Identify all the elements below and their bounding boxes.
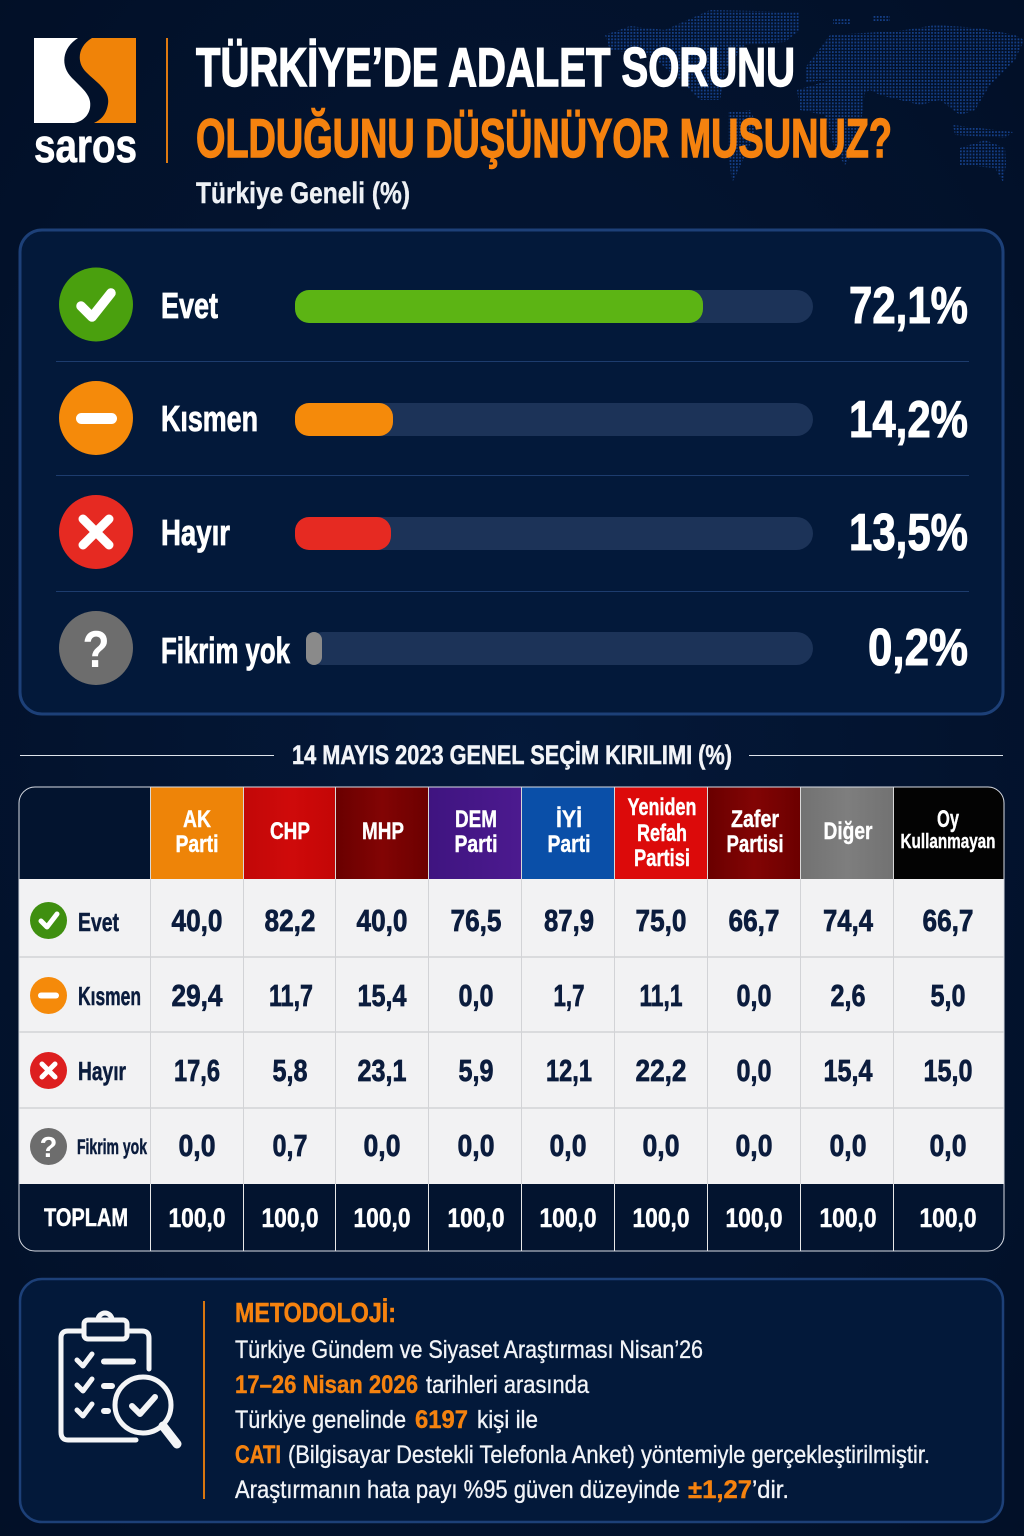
table row: Toplam: 100,0 — [354, 1203, 410, 1233]
table row: Kısmen: 29,4 — [172, 978, 223, 1013]
table row: Evet: 82,2 — [264, 903, 316, 938]
row: Evet: Evet — [161, 285, 218, 326]
table header: Parti — [454, 831, 498, 858]
table header: Parti — [176, 831, 218, 858]
table row: Hayır: 23,1 — [358, 1053, 406, 1088]
row: Fikrim yok: 0,2% — [868, 619, 968, 677]
table header: Oy — [937, 806, 959, 833]
table row: Evet — [30, 902, 974, 939]
table row: Kısmen: 0,0 — [458, 978, 494, 1013]
methodology text: (Bilgisayar Destekli Telefonla Anket) yöntemiyle gerçekleştirilmiştir. — [288, 1441, 930, 1469]
table row: Fikrim yok: 0,0 — [178, 1128, 216, 1163]
table header: DEM — [455, 806, 497, 833]
table header: CHP — [270, 818, 310, 845]
table row: Kısmen: 2,6 — [830, 978, 866, 1013]
methodology text: tarihleri arasında — [426, 1371, 589, 1399]
methodology text: ±1,27 — [688, 1476, 752, 1504]
table row: Kısmen: 1,7 — [554, 978, 584, 1013]
table row: Fikrim yok: ? — [40, 1132, 57, 1164]
methodology text: Araştırmanın hata payı %95 güven düzeyinde — [235, 1476, 680, 1504]
table row: Toplam: 100,0 — [262, 1203, 318, 1233]
table row: Evet: Evet — [78, 907, 119, 937]
table row: Fikrim yok: 0,0 — [830, 1128, 866, 1163]
table header — [176, 794, 996, 872]
table row: Toplam: 100,0 — [920, 1203, 976, 1233]
table row: Hayır: 0,0 — [736, 1053, 772, 1088]
row: Kısmen: Kısmen — [161, 398, 258, 439]
table row: Fikrim yok: Fikrim yok — [77, 1136, 147, 1159]
table header: MHP — [362, 818, 404, 845]
table row: Fikrim yok — [30, 1128, 966, 1165]
table row: Kısmen: 0,0 — [736, 978, 772, 1013]
table row: Fikrim yok: 0,0 — [550, 1128, 586, 1163]
logo: saros — [34, 38, 137, 172]
table row: Toplam: 100,0 — [632, 1203, 690, 1233]
section heading: election breakdown: 14 MAYIS 2023 GENEL SEÇİM KIRILIMI (%) — [292, 740, 732, 770]
table row: Evet: 87,9 — [544, 903, 594, 938]
table header: Yeniden — [628, 794, 696, 821]
table header: Partisi — [726, 831, 784, 858]
row: Evet: 72,1% — [849, 277, 968, 335]
methodology text: Türkiye genelinde — [235, 1406, 406, 1434]
table row: Hayır: 17,6 — [174, 1053, 220, 1088]
table row: Hayır: 15,4 — [824, 1053, 873, 1088]
icon: clipboard with magnifier — [61, 1313, 177, 1444]
row: Fikrim yok: ? — [82, 621, 110, 679]
methodology text: 6197 — [415, 1406, 468, 1434]
row: Kısmen: 14,2% — [849, 391, 968, 449]
logo: saros: saros — [34, 119, 137, 172]
row: Fikrim yok — [59, 611, 968, 685]
table row: Toplam: 100,0 — [540, 1203, 596, 1233]
table row: Kısmen: Kısmen — [78, 981, 141, 1011]
row: Hayır: Hayır — [161, 512, 230, 553]
table header: Diğer — [824, 818, 872, 845]
row: Kısmen — [59, 381, 968, 455]
table row: Toplam: TOPLAM — [44, 1204, 128, 1232]
table row: Kısmen: 11,1 — [640, 978, 682, 1013]
table row: Hayır: 12,1 — [546, 1053, 592, 1088]
table header: Zafer — [731, 806, 779, 833]
methodology text: kişi ile — [477, 1406, 538, 1434]
panel: methodology — [20, 1279, 1003, 1522]
methodology text: 17–26 Nisan 2026 — [235, 1371, 418, 1399]
table row: Evet: 76,5 — [450, 903, 502, 938]
table row: Evet: 40,0 — [172, 903, 222, 938]
table row: Toplam: 100,0 — [168, 1203, 226, 1233]
table row: Fikrim yok: 0,7 — [272, 1128, 308, 1163]
table row: Fikrim yok: 0,0 — [736, 1128, 772, 1163]
table row: Kısmen: 11,7 — [269, 978, 313, 1013]
row: Hayır: 13,5% — [849, 504, 968, 562]
table row: Fikrim yok: 0,0 — [364, 1128, 400, 1163]
table header: Parti — [548, 831, 590, 858]
table row: Toplam: 100,0 — [726, 1203, 782, 1233]
table header: Kullanmayan — [900, 831, 996, 853]
table header: Refah — [637, 820, 687, 847]
methodology text: Türkiye Gündem ve Siyaset Araştırması Nisan’26 — [235, 1336, 703, 1364]
header divider — [166, 38, 168, 163]
table row: Hayır: 5,9 — [458, 1053, 494, 1088]
table row: Evet: 75,0 — [636, 903, 686, 938]
table row: Fikrim yok: 0,0 — [458, 1128, 494, 1163]
row: Hayır — [59, 495, 968, 569]
table row: Kısmen — [30, 977, 966, 1014]
table: election breakdown — [19, 787, 1004, 1251]
panel: overall results — [20, 230, 1003, 714]
table row: Evet: 66,7 — [728, 903, 780, 938]
table row: Evet: 66,7 — [922, 903, 974, 938]
table row: Hayır: 15,0 — [924, 1053, 972, 1088]
methodology text — [235, 1297, 930, 1504]
table row: Toplam: 100,0 — [820, 1203, 876, 1233]
table row: Hayır — [30, 1052, 972, 1089]
table header: Partisi — [634, 845, 690, 872]
table row: Evet: 74,4 — [823, 903, 874, 938]
methodology text: ’dir. — [752, 1476, 789, 1504]
methodology text: CATI — [235, 1441, 281, 1469]
title line 1: TÜRKİYE’DE ADALET SORUNU — [196, 36, 795, 98]
subtitle: Türkiye Geneli (%) — [196, 177, 410, 210]
world map dotted background — [605, 10, 1024, 183]
table row: Kısmen: 5,0 — [930, 978, 966, 1013]
table row: Evet: 40,0 — [356, 903, 408, 938]
table header: AK — [183, 806, 212, 833]
table row: Hayır: Hayır — [78, 1056, 126, 1086]
table header: İYİ — [556, 806, 582, 833]
row: Fikrim yok: Fikrim yok — [161, 630, 291, 671]
row: Evet — [59, 268, 968, 342]
table row: Fikrim yok: 0,0 — [642, 1128, 680, 1163]
table row: Hayır: 22,2 — [636, 1053, 686, 1088]
table row: Toplam — [44, 1203, 976, 1233]
methodology text: METODOLOJİ: — [235, 1297, 396, 1328]
table row: Toplam: 100,0 — [448, 1203, 504, 1233]
table row: Kısmen: 15,4 — [358, 978, 407, 1013]
table row: Fikrim yok: 0,0 — [930, 1128, 966, 1163]
table row: Hayır: 5,8 — [272, 1053, 308, 1088]
